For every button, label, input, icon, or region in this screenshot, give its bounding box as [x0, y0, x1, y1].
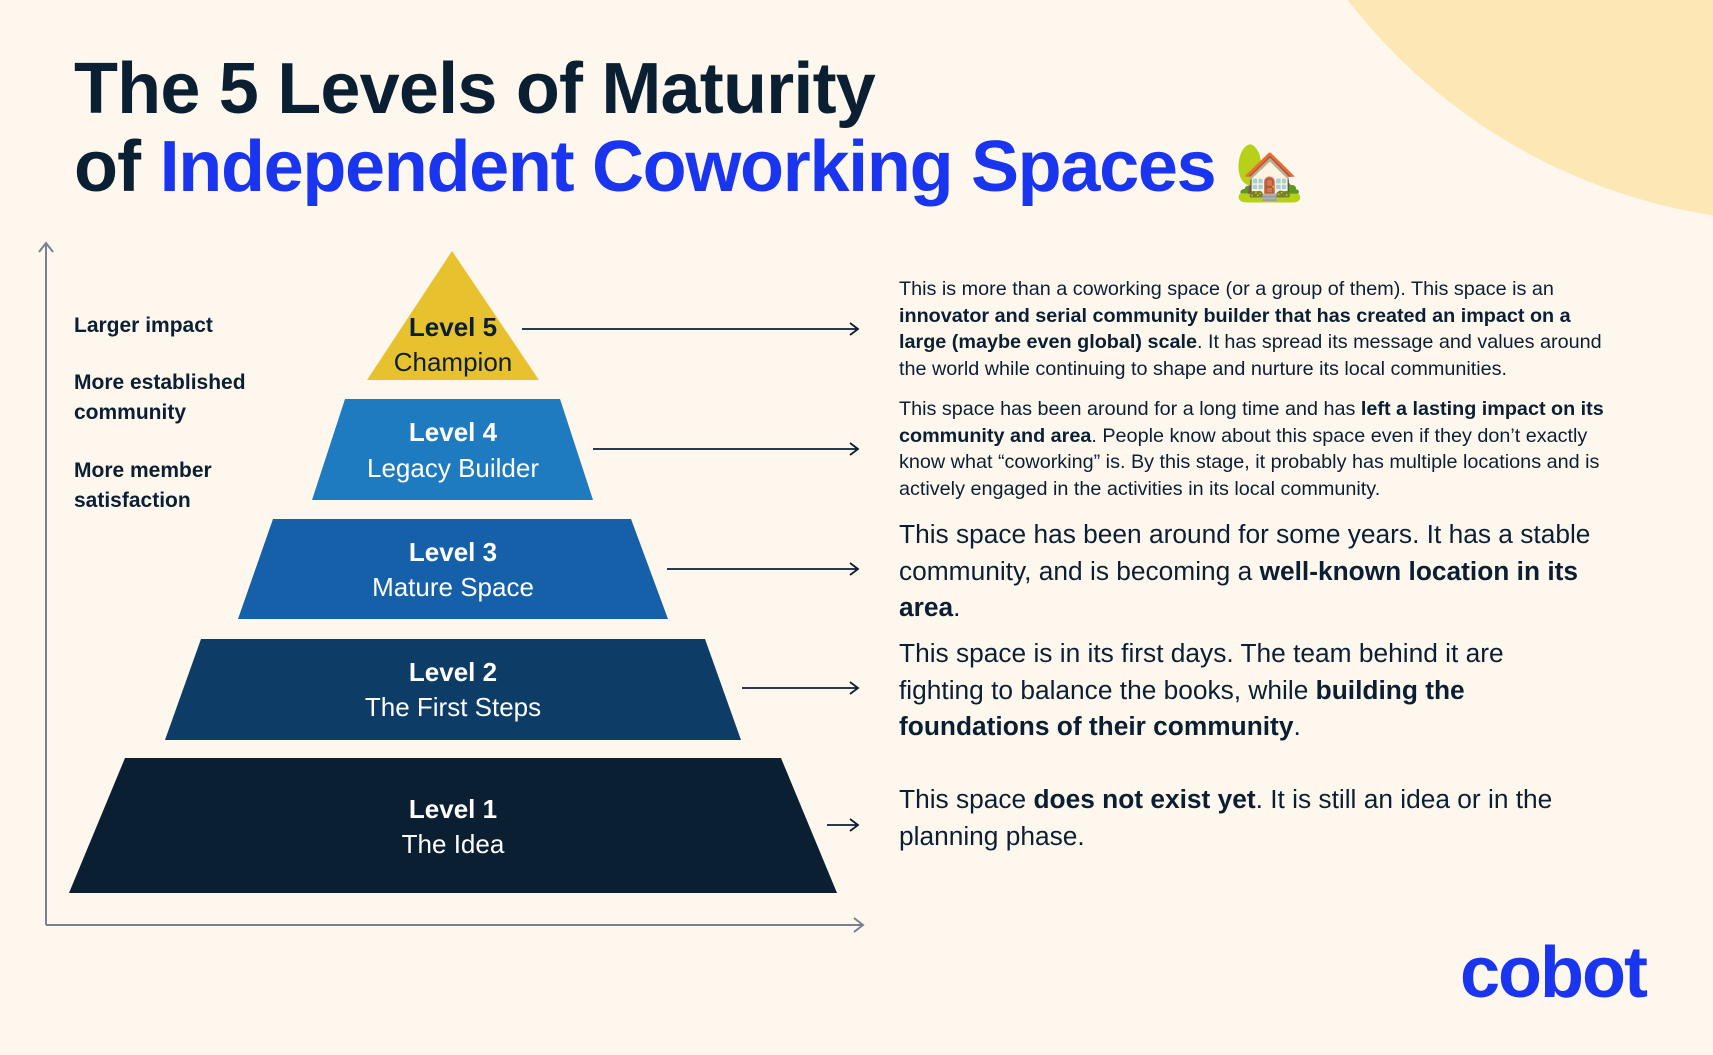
left label: larger impact: Larger impact [74, 314, 213, 337]
decorative corner blob [1228, 0, 1713, 222]
left label: established community [74, 371, 246, 424]
level 5 [367, 251, 539, 380]
level 4 [312, 399, 593, 500]
text: level 4 description [899, 398, 1604, 500]
arrows [522, 323, 858, 831]
text: level 3 description [899, 519, 1590, 622]
text: level 4 description: This space has been around for a long time and has left a lasting impact on its [899, 398, 1604, 420]
text: level 4 description: know what “coworking” is. By this stage, it probably has multiple locations and is [899, 451, 1599, 473]
level 5: Level 5 [409, 312, 497, 342]
text: level 2 description [899, 638, 1504, 741]
level 3: Level 3 [409, 537, 497, 567]
level 2: Level 2 [409, 657, 497, 687]
text: level 2 description: fighting to balance the books, while building the [899, 674, 1465, 704]
text: level 5 description [899, 278, 1602, 380]
text: level 4 description: community and area. People know about this space even if they don’t exactly [899, 425, 1587, 447]
left label: member satisfaction: satisfaction [74, 489, 191, 512]
level 4: Legacy Builder [367, 453, 539, 483]
level 1: Level 1 [409, 794, 497, 824]
level 1: The Idea [402, 829, 505, 859]
text: level 1 description: planning phase. [899, 820, 1085, 850]
text: level 1 description: This space does not exist yet. It is still an idea or in the [899, 784, 1552, 814]
left label: established community: community [74, 401, 186, 424]
level 2: The First Steps [365, 692, 541, 722]
text: level 5 description: This is more than a coworking space (or a group of them). This space is an [899, 278, 1554, 300]
text: level 3 description: This space has been around for some years. It has a stable [899, 519, 1590, 549]
level 3: Mature Space [372, 572, 534, 602]
left label: established community: More established [74, 371, 246, 394]
level 2 [165, 639, 741, 740]
level 3 [238, 519, 668, 619]
text: level 4 description: actively engaged in the activities in its local community. [899, 478, 1380, 500]
text: level 5 description: the world while continuing to shape and nurture its local communities. [899, 358, 1507, 380]
level 1 [69, 758, 837, 893]
text: level 1 description [899, 784, 1552, 850]
text: level 5 description: innovator and serial community builder that has created an impact on a [899, 305, 1571, 327]
title: The 5 Levels of Maturity [74, 49, 875, 129]
title: of Independent Coworking Spaces 🏡 [74, 127, 1304, 208]
title [74, 49, 1304, 208]
text: level 3 description: community, and is becoming a well-known location in its [899, 556, 1578, 586]
text: level 2 description: This space is in its first days. The team behind it are [899, 638, 1504, 668]
logo: cobot: cobot [1460, 933, 1646, 1013]
text: level 5 description: large (maybe even global) scale. It has spread its message and values around [899, 331, 1602, 353]
text: level 2 description: foundations of their community. [899, 711, 1301, 741]
level 5: Champion [394, 347, 512, 377]
axes [39, 243, 863, 932]
level 4: Level 4 [409, 417, 498, 447]
left label: member satisfaction [74, 459, 212, 512]
text: level 3 description: area. [899, 592, 960, 622]
left label: member satisfaction: More member [74, 459, 212, 482]
